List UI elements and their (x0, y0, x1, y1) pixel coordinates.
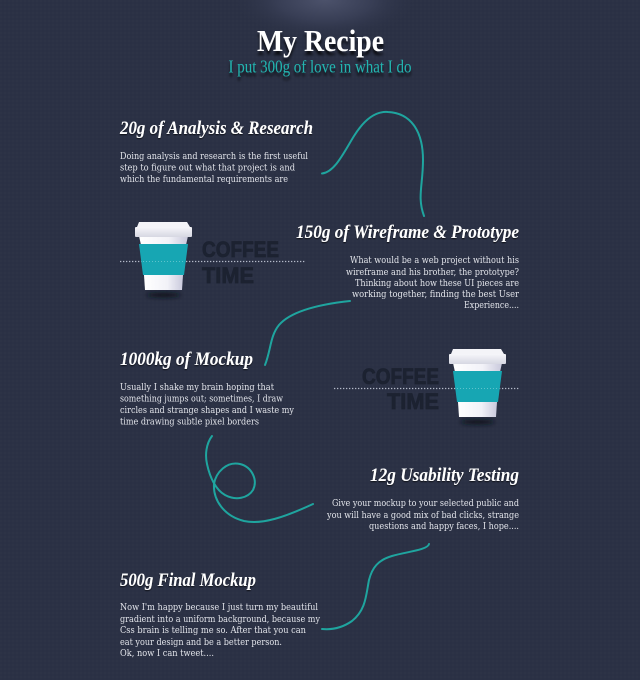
text: final mockup body: Ok, now I can tweet.... (120, 648, 214, 659)
text: final mockup body: gradient into a uniform background, because my (120, 614, 321, 625)
heading: analysis: 20g of Analysis & Research (119, 118, 313, 139)
text: analysis body: step to figure out what that project is and (120, 162, 295, 174)
text: final mockup body: Css brain is telling me so. After that you can (120, 625, 306, 636)
dotted line (334, 388, 519, 390)
text: mockup body: something jumps out; sometimes, I draw (120, 394, 283, 404)
arrow: looped curve 3 (206, 436, 313, 522)
coffee time label: COFFEE (202, 237, 279, 262)
title: My Recipe (257, 23, 384, 58)
text: wireframe body: What would be a web project without his (350, 255, 519, 266)
text: final mockup body: Now I'm happy because I just turn my beautiful (120, 602, 318, 613)
text: usability body: Give your mockup to your selected public and (332, 498, 519, 509)
text: wireframe body: working together, finding the best User (352, 289, 520, 300)
heading: final mockup: 500g Final Mockup (120, 570, 256, 591)
text: wireframe body: Experience.... (464, 300, 519, 311)
dotted line (120, 260, 306, 262)
text: mockup body: time drawing subtle pixel borders (120, 416, 259, 428)
coffee time label: COFFEE (362, 364, 439, 389)
section: analysis and research (119, 118, 313, 185)
text: mockup body: Usually I shake my brain hoping that (120, 382, 274, 393)
heading: wireframe: 150g of Wireframe & Prototype (296, 222, 520, 243)
icon: coffee cup (449, 349, 506, 424)
text: wireframe body: Thinking about how these UI pieces are (355, 278, 519, 289)
arrow: curve 4 (322, 544, 429, 629)
coffee cup group 1 (120, 222, 306, 298)
text: final mockup body (120, 602, 321, 659)
arrow: curve 1 (322, 112, 424, 216)
coffee time label (202, 237, 279, 288)
heading: mockup: 1000kg of Mockup (120, 349, 253, 370)
text: mockup body (120, 382, 295, 428)
section: wireframe and prototype (296, 222, 520, 311)
text: wireframe body (346, 255, 520, 311)
section: final mockup (120, 570, 321, 659)
coffee time label: TIME (387, 389, 439, 414)
section: usability testing (326, 465, 519, 532)
coffee time label (362, 364, 439, 414)
text: usability body (326, 498, 519, 532)
icon: coffee cup (135, 222, 192, 298)
text: usability body: you will have a good mix of bad clicks, strange (326, 510, 519, 521)
text: analysis body (120, 151, 308, 185)
text: final mockup body: eat your design and be a better person. (120, 637, 282, 648)
text: analysis body: which the fundamental requirements are (120, 174, 288, 185)
text: mockup body: circles and strange shapes and I waste my (120, 405, 295, 416)
text: usability body: questions and happy faces, I hope.... (369, 521, 519, 532)
subtitle: I put 300g of love in what I do (228, 56, 412, 76)
text: wireframe body: wireframe and his brother, the prototype? (346, 267, 519, 278)
coffee cup group 2 (334, 349, 519, 424)
heading: usability: 12g Usability Testing (370, 465, 519, 486)
coffee time label: TIME (202, 263, 254, 288)
section: mockup (120, 349, 295, 428)
arrow: curve 2 (265, 301, 350, 365)
text: analysis body: Doing analysis and research is the first useful (120, 151, 308, 162)
